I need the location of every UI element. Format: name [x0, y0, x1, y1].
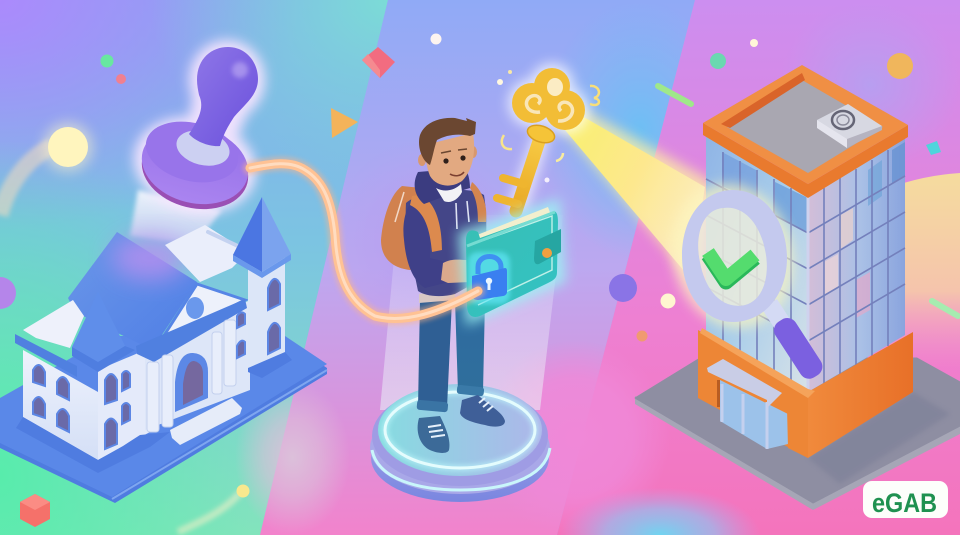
triangle: orange — [331, 108, 358, 138]
pediment — [158, 284, 245, 345]
steps — [170, 398, 242, 445]
background: left panel — [0, 0, 400, 535]
wallet strap — [534, 229, 561, 264]
drawstrings — [456, 201, 469, 229]
platform — [0, 336, 327, 503]
dot: cream — [660, 294, 676, 308]
yellow light beam — [560, 105, 710, 290]
key collar — [525, 122, 557, 146]
dot: red — [116, 74, 126, 84]
key bow — [512, 68, 585, 130]
logo text: eGAB — [872, 488, 937, 518]
arm — [403, 200, 447, 288]
sphere: amber — [887, 53, 913, 79]
hood — [415, 168, 470, 204]
roof deck — [727, 80, 883, 173]
back leg — [455, 300, 485, 392]
sphere: mint — [710, 53, 726, 69]
collar — [436, 184, 462, 202]
roof frame side — [703, 123, 908, 198]
magnifier glow — [657, 171, 809, 341]
cube: red — [20, 494, 50, 527]
wing roof — [23, 300, 84, 348]
key shaft — [516, 135, 541, 211]
check mark — [708, 252, 755, 282]
podium — [370, 384, 550, 502]
cube: teal — [926, 141, 941, 155]
bar: green right — [932, 301, 958, 316]
wing right wall — [98, 348, 150, 460]
rainbow trail and sun orb — [0, 122, 93, 215]
wing cornice — [15, 334, 77, 377]
main cornice — [136, 299, 247, 362]
stamp collar — [173, 125, 233, 171]
panel: office tower — [635, 65, 960, 510]
platform — [635, 358, 960, 510]
magnifier handle — [759, 297, 826, 383]
padlock — [468, 252, 510, 304]
shoes — [418, 395, 505, 453]
key teeth — [497, 178, 524, 204]
door — [175, 353, 208, 412]
glass left face — [706, 133, 808, 392]
head — [418, 118, 477, 186]
main roof — [68, 232, 197, 350]
magnifier — [657, 171, 826, 383]
stamp glow — [123, 40, 267, 226]
stamp light beam — [130, 190, 222, 245]
background: right panel — [550, 0, 960, 535]
dot: white near tower — [750, 39, 758, 47]
roof vent unit — [817, 104, 882, 148]
wallet body — [466, 211, 558, 317]
sparkles — [497, 70, 599, 182]
windows — [33, 279, 280, 449]
belt — [419, 289, 455, 303]
wallet glow — [458, 198, 566, 326]
glass right face — [808, 133, 905, 392]
dot: white top — [430, 34, 442, 44]
main front wall — [145, 300, 250, 430]
sphere: small orange — [636, 330, 648, 342]
key glow — [507, 63, 589, 215]
roof frame top — [703, 65, 908, 184]
sphere: purple middle — [609, 274, 637, 302]
wallet pages — [477, 207, 552, 245]
base trim — [16, 417, 170, 473]
magnifier ring — [682, 190, 787, 322]
right strap — [470, 182, 486, 222]
magnifier lens — [698, 208, 767, 306]
hand — [441, 260, 470, 283]
backpack — [381, 186, 440, 270]
peach curved area — [874, 173, 960, 354]
orange base — [698, 328, 913, 458]
wing left wall — [23, 350, 98, 460]
golden key — [497, 63, 589, 215]
front leg — [418, 300, 452, 408]
background: middle panel — [260, 0, 695, 535]
wallet snap — [542, 248, 552, 258]
podium light ring — [385, 392, 535, 468]
sphere: purple left — [0, 277, 16, 309]
glass panes accents — [722, 142, 905, 318]
wallet — [458, 198, 566, 326]
person — [381, 118, 505, 453]
glass grid — [706, 150, 905, 392]
stamp base — [133, 120, 257, 220]
comet: yellow — [178, 484, 250, 532]
torso — [406, 190, 486, 296]
entrance canopy — [707, 359, 782, 408]
dot: green — [100, 54, 114, 68]
podium lower glow line — [372, 448, 550, 490]
small spire — [72, 292, 135, 372]
logo: eGAB badge — [863, 481, 948, 518]
left strap — [410, 196, 442, 252]
tower — [233, 197, 292, 378]
roof inner shadow — [721, 73, 805, 128]
bar: green yellow — [658, 86, 691, 104]
panel: government building — [0, 190, 327, 503]
spotlight cone — [380, 215, 563, 410]
columns — [147, 320, 236, 432]
glowing ribbon — [250, 164, 478, 318]
cube: pink-red diamond — [362, 47, 395, 78]
stamp handle — [189, 47, 258, 146]
background: bottom blends — [235, 340, 760, 535]
stamp — [123, 40, 267, 226]
entrance doors — [707, 359, 808, 458]
rear white roof — [165, 225, 248, 282]
